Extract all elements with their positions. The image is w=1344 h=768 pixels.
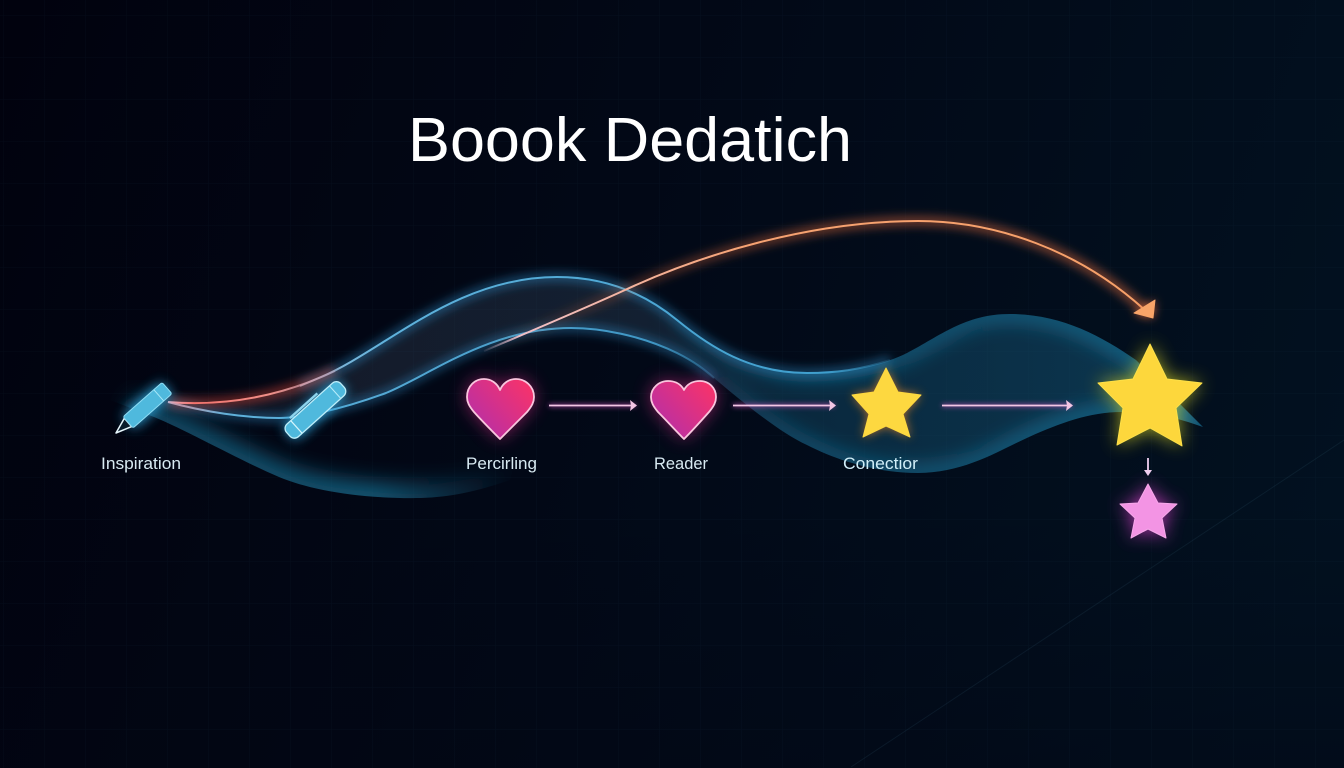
arrow: reader to connection bbox=[733, 400, 836, 411]
icon: nib pen bbox=[110, 381, 173, 440]
icon: large yellow star bbox=[1098, 344, 1202, 446]
arrow: heart to reader bbox=[549, 400, 637, 411]
label: Reader: Reader bbox=[654, 454, 708, 473]
label: Percirling: Percirling bbox=[466, 454, 537, 473]
flow ribbon bbox=[130, 277, 1203, 498]
ribbon: lower glowing blue line bbox=[168, 328, 714, 418]
ribbon: lower-left teal wave bbox=[130, 408, 510, 498]
arrow: large star to pink star bbox=[1144, 458, 1152, 476]
ribbon: main translucent band bbox=[168, 277, 1203, 473]
arrow: connection to large star bbox=[942, 400, 1073, 411]
ribbon: upper glowing blue line bbox=[300, 277, 890, 386]
label: Conectior: Conectior bbox=[843, 454, 918, 473]
icon: medium yellow star bbox=[852, 368, 921, 437]
icon: capped pen bbox=[281, 377, 349, 442]
label: Inspiration: Inspiration bbox=[101, 454, 181, 473]
icon: pink star bbox=[1120, 484, 1177, 538]
arrow: long orange arc to the large star bbox=[168, 221, 1155, 403]
icon: heart two bbox=[651, 381, 716, 439]
title: Boook Dedatich bbox=[408, 106, 852, 175]
icon: heart one bbox=[467, 379, 534, 439]
